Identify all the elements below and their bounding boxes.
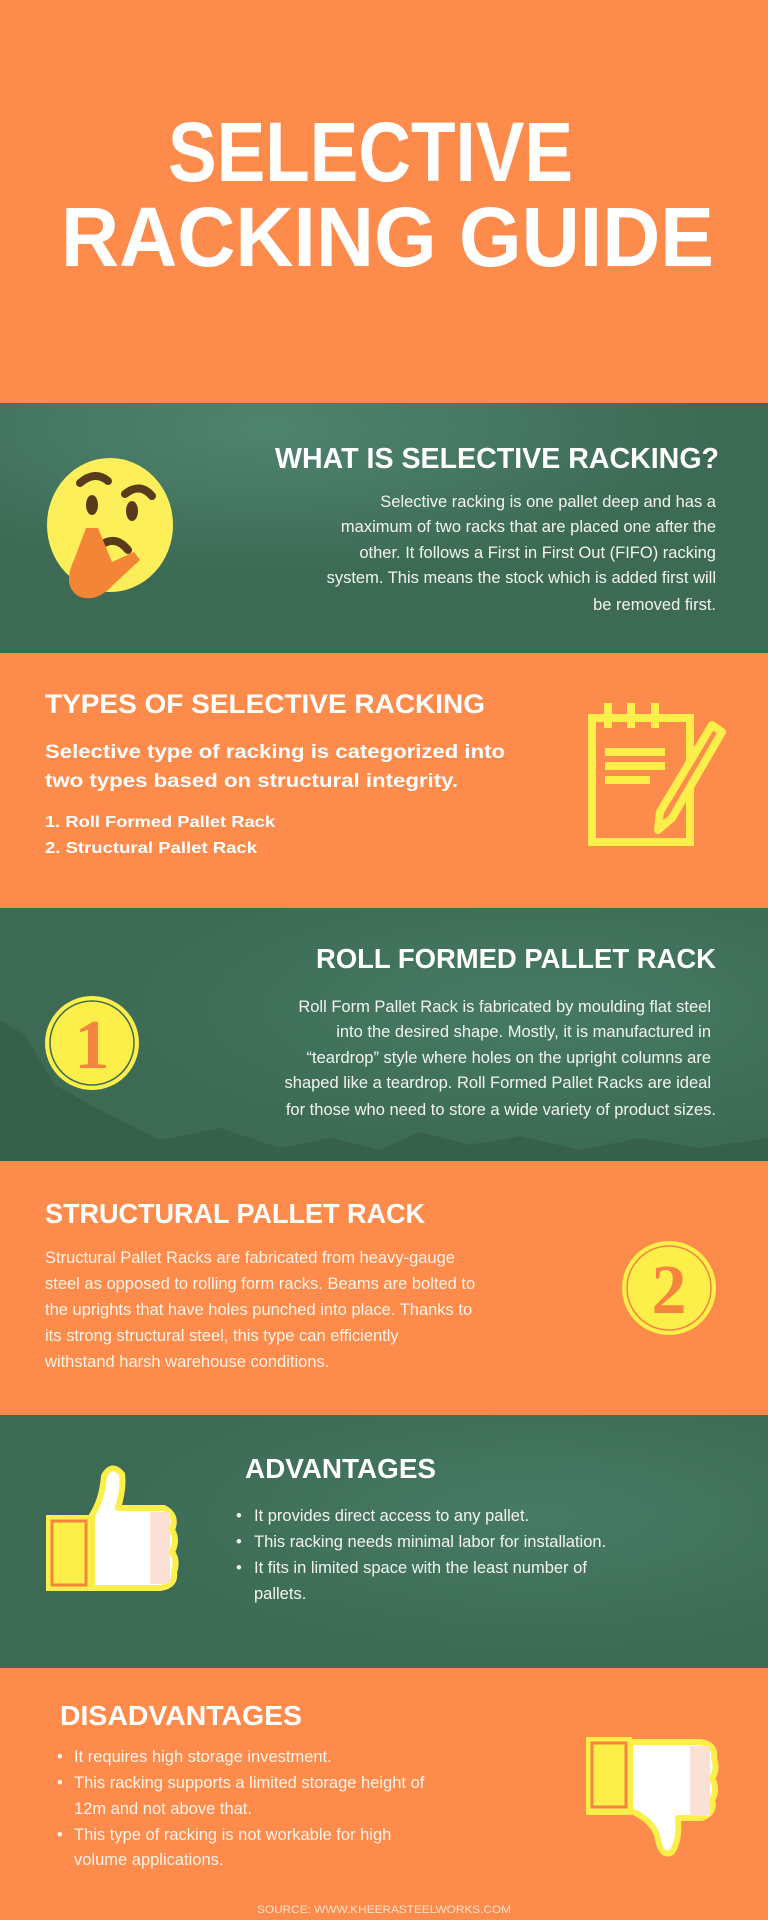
body text: system. This means the stock which is added first will xyxy=(327,569,716,587)
title xyxy=(61,105,714,284)
body text xyxy=(327,493,717,614)
panel: structural pallet rack xyxy=(0,1161,768,1415)
bullet list: It fits in limited space with the least number of xyxy=(254,1559,587,1577)
panel: types of selective racking xyxy=(0,653,768,908)
subtitle: two types based on structural integrity. xyxy=(45,771,458,792)
panel: what is selective racking xyxy=(0,403,768,653)
body text: “teardrop” style where holes on the upright columns are xyxy=(307,1049,711,1067)
heading: ROLL FORMED PALLET RACK xyxy=(316,943,716,974)
body text: withstand harsh warehouse conditions. xyxy=(44,1353,329,1371)
body text: other. It follows a First in First Out (FIFO) racking xyxy=(359,544,716,562)
title: RACKING GUIDE xyxy=(61,190,714,284)
heading: TYPES OF SELECTIVE RACKING xyxy=(45,689,485,719)
body text xyxy=(44,1249,475,1371)
header background xyxy=(0,0,768,403)
body text: be removed first. xyxy=(593,596,716,614)
icon: number 2: 2 xyxy=(652,1252,686,1329)
body text: steel as opposed to rolling form racks. Beams are bolted to xyxy=(45,1275,475,1293)
bullet list: It requires high storage investment. xyxy=(74,1748,332,1766)
subtitle: Selective type of racking is categorized into xyxy=(45,742,505,763)
icon: thumbs up xyxy=(46,1468,176,1591)
list: 1. Roll Formed Pallet Rack xyxy=(45,814,275,831)
bullet list: • xyxy=(57,1748,63,1766)
source: SOURCE: WWW.KHEERASTEELWORKS.COM xyxy=(257,1904,511,1916)
bullet list: • xyxy=(57,1826,63,1844)
bullet list: volume applications. xyxy=(74,1851,224,1869)
bullet list: This racking supports a limited storage height of xyxy=(74,1774,425,1792)
body text: its strong structural steel, this type can efficiently xyxy=(45,1327,399,1345)
panel: disadvantages xyxy=(0,1668,768,1920)
icon: notepad and pencil xyxy=(592,703,722,842)
title: SELECTIVE xyxy=(168,105,573,199)
bullet list: • xyxy=(236,1507,242,1525)
bullet list: 12m and not above that. xyxy=(74,1800,252,1818)
bullet list: • xyxy=(57,1774,63,1792)
bullet list: This type of racking is not workable for high xyxy=(74,1826,391,1844)
heading: WHAT IS SELECTIVE RACKING? xyxy=(275,443,719,475)
body text: maximum of two racks that are placed one after the xyxy=(341,518,716,536)
bullet list: • xyxy=(236,1559,242,1577)
icon: number 2 xyxy=(622,1241,716,1335)
bullet list: It provides direct access to any pallet. xyxy=(254,1507,529,1525)
icon: number 1: 1 xyxy=(74,1007,110,1084)
body text: Roll Form Pallet Rack is fabricated by moulding flat steel xyxy=(298,998,711,1016)
icon: number 1 xyxy=(45,996,139,1090)
body text: into the desired shape. Mostly, it is manufactured in xyxy=(336,1023,711,1041)
body text xyxy=(285,998,716,1119)
heading: ADVANTAGES xyxy=(245,1453,436,1484)
icon: thinking emoji xyxy=(47,458,173,598)
body text: Selective racking is one pallet deep and has a xyxy=(380,493,717,511)
heading: STRUCTURAL PALLET RACK xyxy=(45,1198,425,1229)
bullet list xyxy=(57,1748,425,1869)
body text: shaped like a teardrop. Roll Formed Pallet Racks are ideal xyxy=(285,1074,711,1092)
body text: for those who need to store a wide variety of product sizes. xyxy=(286,1101,716,1119)
bullet list: This racking needs minimal labor for installation. xyxy=(254,1533,606,1551)
body text: the uprights that have holes punched into place. Thanks to xyxy=(45,1301,472,1319)
body text: Structural Pallet Racks are fabricated from heavy-gauge xyxy=(45,1249,455,1267)
heading: DISADVANTAGES xyxy=(60,1700,302,1731)
bullet list xyxy=(236,1507,606,1603)
panel: roll formed pallet rack xyxy=(0,908,768,1161)
subtitle xyxy=(45,742,505,792)
list xyxy=(45,814,275,857)
list: 2. Structural Pallet Rack xyxy=(45,840,257,857)
bullet list: • xyxy=(236,1533,242,1551)
bullet list: pallets. xyxy=(254,1585,306,1603)
panel: advantages xyxy=(0,1415,768,1668)
icon: thumbs down xyxy=(586,1737,716,1854)
